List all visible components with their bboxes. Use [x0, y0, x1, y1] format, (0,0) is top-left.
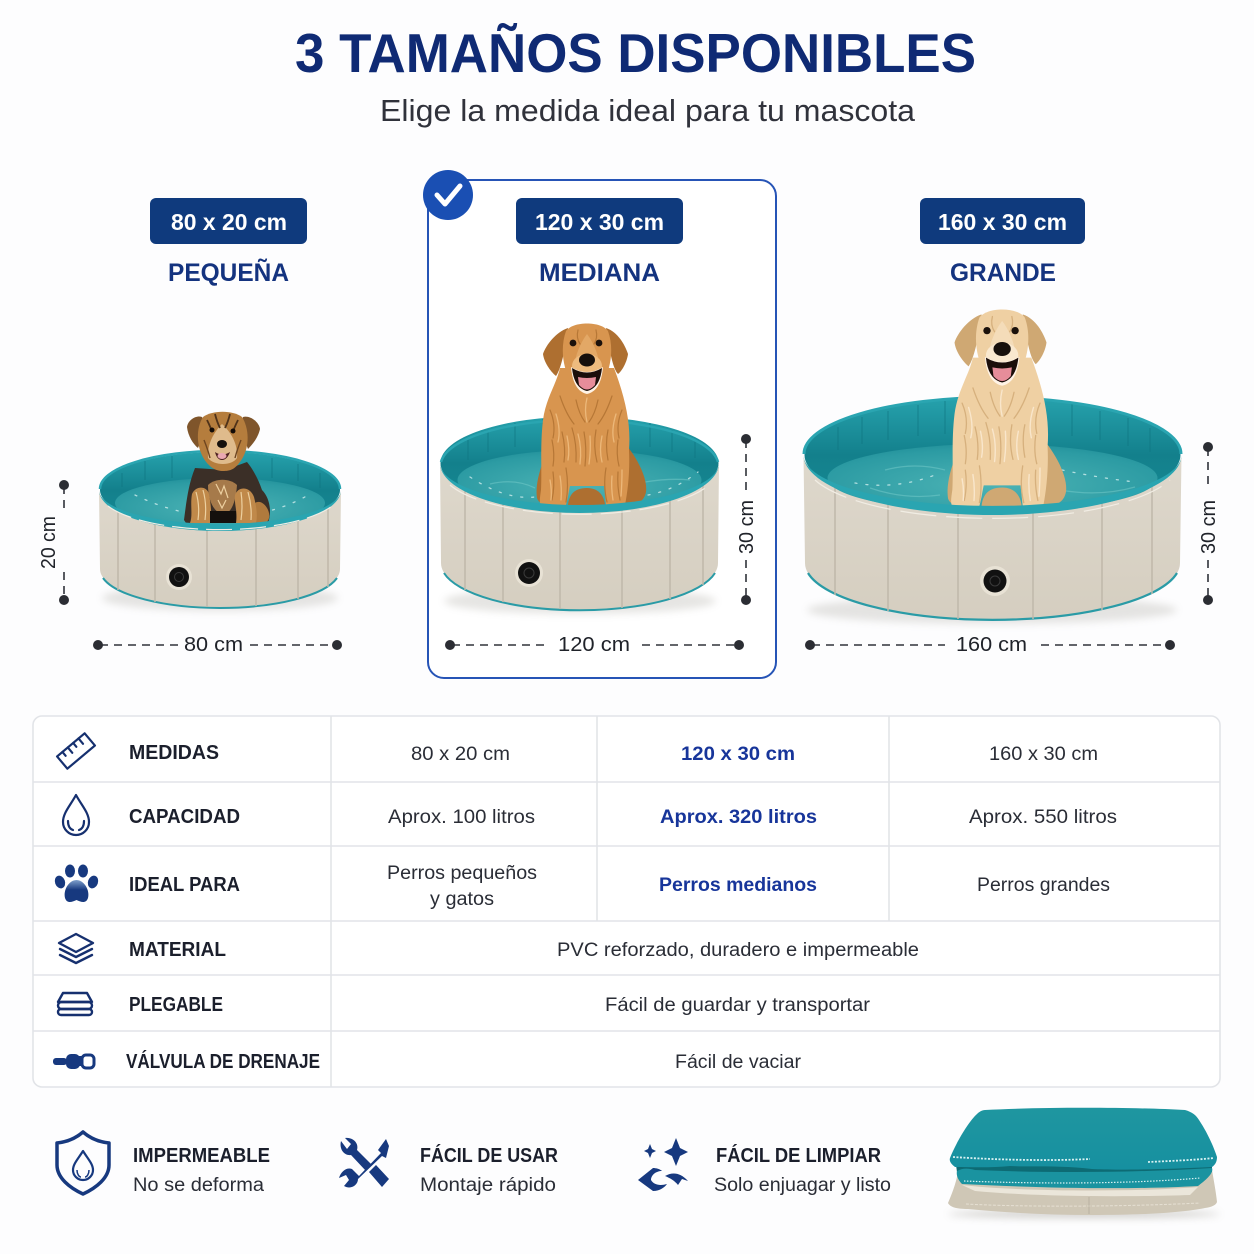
- row: medidas: 120 x 30 cm: [681, 744, 795, 765]
- dimension: 30 cm height: [1198, 442, 1220, 605]
- panel: mediana (selected): [423, 170, 776, 678]
- icon: crossed tools: [339, 1138, 389, 1187]
- size badge: 80 x 20 cm: [150, 198, 307, 244]
- dimension: 30 cm height: [736, 434, 758, 605]
- row: medidas: 160 x 30 cm: [989, 744, 1098, 765]
- row: ideal para: Perros pequeños: [387, 863, 537, 884]
- icon: paw: [53, 864, 100, 902]
- row: capacidad: Aprox. 550 litros: [969, 807, 1117, 828]
- size name: grande: GRANDE: [950, 259, 1056, 287]
- row: medidas: [57, 733, 1098, 769]
- feature: facil de limpiar: FÁCIL DE LIMPIAR: [716, 1144, 882, 1167]
- feature: facil de limpiar: [638, 1138, 891, 1196]
- row: valvula: [53, 1050, 802, 1073]
- size badge: 160 x 30 cm: [920, 198, 1085, 244]
- dimension: 120 cm width: [445, 634, 744, 656]
- row: valvula: Fácil de vaciar: [675, 1052, 802, 1073]
- feature: facil de usar: [339, 1138, 558, 1196]
- feature: impermeable: No se deforma: [133, 1175, 264, 1196]
- icon: layers: [59, 934, 93, 963]
- row: capacidad: [63, 795, 1117, 835]
- row: material: MATERIAL: [129, 939, 226, 961]
- dimension: 20 cm height: 20 cm: [38, 516, 60, 569]
- feature: impermeable: IMPERMEABLE: [133, 1145, 270, 1167]
- feature: facil de usar: FÁCIL DE USAR: [420, 1144, 558, 1167]
- icon: folded stack: [58, 993, 92, 1015]
- dimension: 160 cm width: 160 cm: [956, 634, 1027, 656]
- dimension: 120 cm width: 120 cm: [558, 634, 630, 656]
- row: plegable: [58, 993, 871, 1016]
- subtitle: Elige la medida ideal para tu mascota: [380, 93, 916, 128]
- size badge: 120 x 30 cm: [516, 198, 683, 244]
- row: plegable: Fácil de guardar y transportar: [605, 995, 871, 1016]
- panel: grande: [804, 198, 1220, 656]
- icon: sparkles and water: [638, 1138, 688, 1191]
- icon: check badge: [423, 170, 473, 220]
- pool: medium with golden dog: [440, 324, 719, 614]
- row: ideal para: y gatos: [430, 889, 494, 910]
- comparison table: [33, 716, 1220, 1087]
- row: valvula: VÁLVULA DE DRENAJE: [126, 1050, 320, 1073]
- row: capacidad: CAPACIDAD: [129, 806, 240, 828]
- row: ideal para: [53, 863, 1110, 910]
- feature: facil de limpiar: Solo enjuagar y listo: [714, 1175, 891, 1196]
- size badge: 80 x 20 cm: 80 x 20 cm: [171, 209, 287, 235]
- dimension: 160 cm width: [805, 634, 1175, 656]
- title: 3 TAMAÑOS DISPONIBLES: [295, 22, 976, 84]
- pool: large with light golden dog: [804, 310, 1182, 624]
- size badge: 160 x 30 cm: 160 x 30 cm: [938, 209, 1067, 235]
- size badge: 120 x 30 cm: 120 x 30 cm: [535, 209, 664, 235]
- feature: impermeable: [57, 1132, 270, 1196]
- row: ideal para: Perros medianos: [659, 875, 817, 896]
- row: material: [59, 934, 919, 963]
- pool: small with yorkie: [99, 412, 341, 611]
- row: ideal para: Perros grandes: [977, 875, 1110, 896]
- dimension: 30 cm height: 30 cm: [1198, 500, 1220, 554]
- row: ideal para: IDEAL PARA: [129, 874, 240, 896]
- icon: ruler: [57, 733, 95, 769]
- row: medidas: 80 x 20 cm: [411, 744, 510, 765]
- size name: pequeña: PEQUEÑA: [168, 257, 289, 287]
- row: plegable: PLEGABLE: [129, 994, 223, 1016]
- row: capacidad: Aprox. 100 litros: [388, 807, 535, 828]
- dimension: 80 cm width: 80 cm: [184, 634, 243, 656]
- dimension: 30 cm height: 30 cm: [736, 500, 758, 554]
- icon: drain valve: [53, 1054, 94, 1069]
- icon: water drop: [63, 795, 89, 835]
- folded pool illustration: [948, 1108, 1220, 1218]
- size name: mediana: MEDIANA: [539, 259, 660, 287]
- row: material: PVC reforzado, duradero e impermeable: [557, 940, 919, 961]
- row: medidas: MEDIDAS: [129, 742, 219, 764]
- selection frame: [428, 180, 776, 678]
- dimension: 80 cm width: [93, 634, 342, 656]
- row: capacidad: Aprox. 320 litros: [660, 807, 817, 828]
- dimension: 20 cm height: [38, 480, 69, 605]
- panel: pequeña: [38, 198, 342, 656]
- feature: facil de usar: Montaje rápido: [420, 1175, 556, 1196]
- icon: shield with drop: [57, 1132, 109, 1194]
